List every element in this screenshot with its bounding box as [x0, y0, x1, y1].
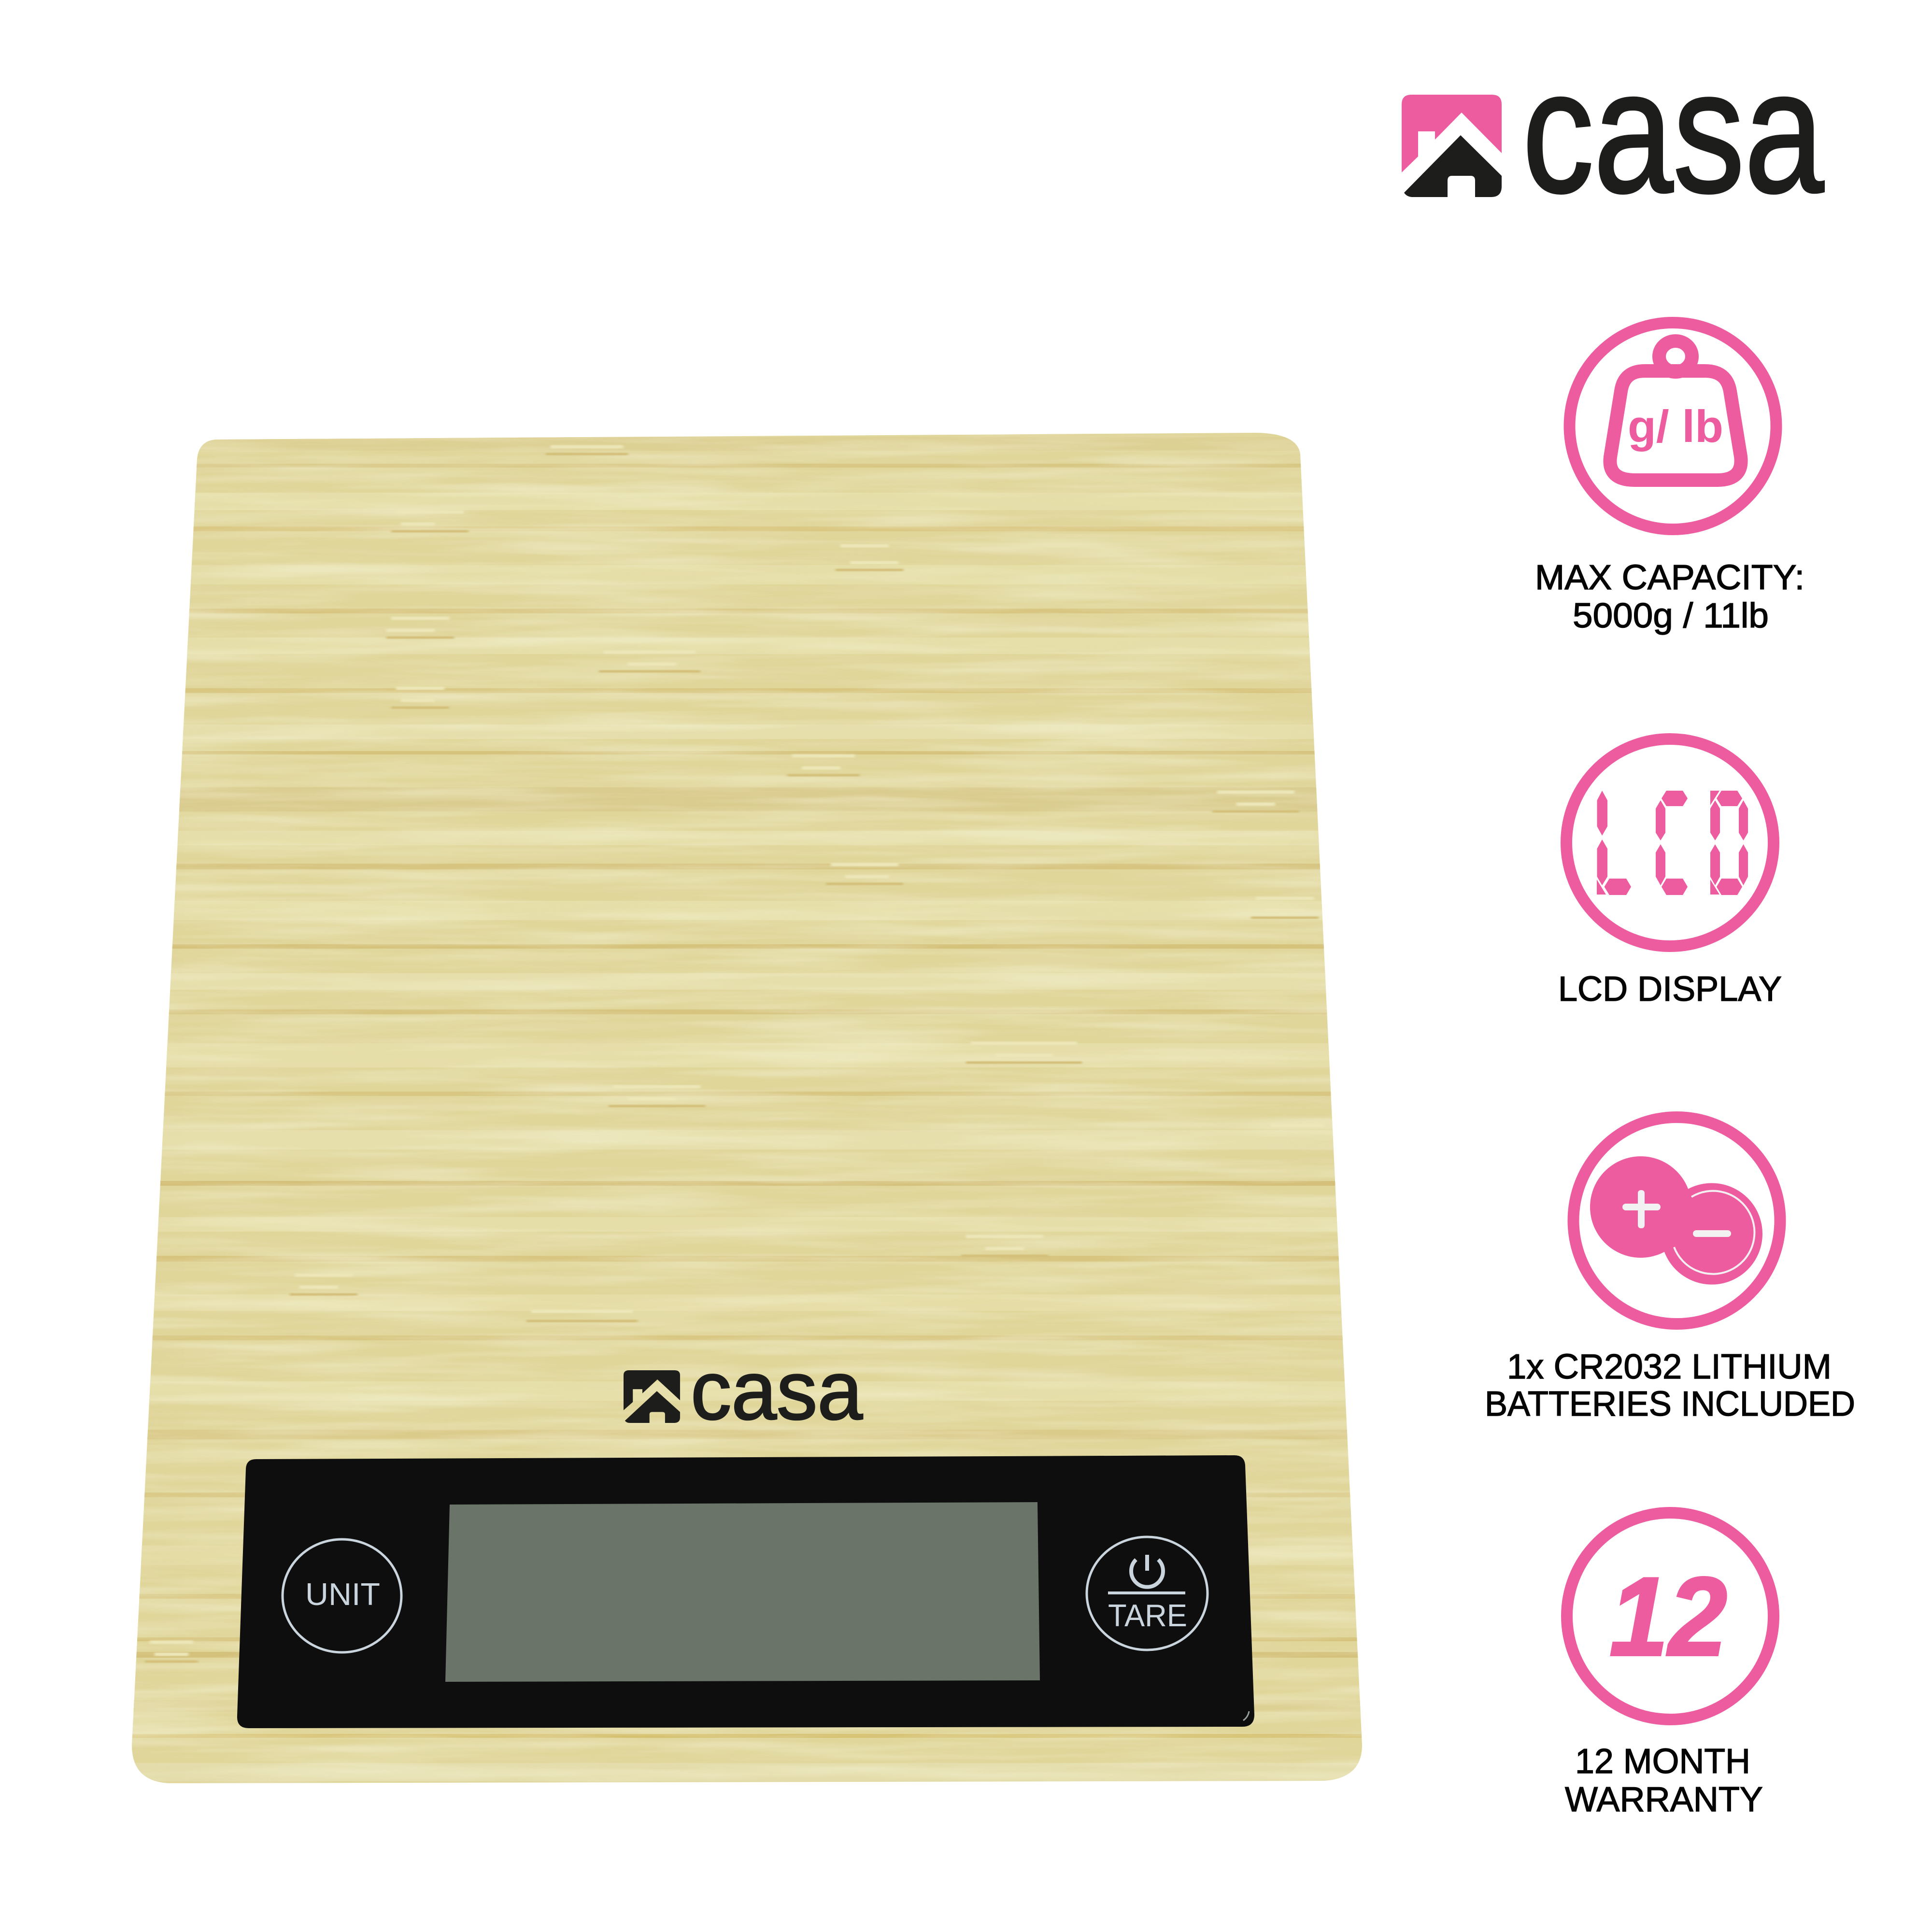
TARE button with power icon [1087, 1537, 1208, 1650]
wood surface [121, 425, 1377, 1792]
label: MAX CAPACITY: [1535, 558, 1804, 597]
label [1485, 1348, 1855, 1423]
label [1535, 558, 1804, 635]
icon: coin batteries [1574, 1117, 1780, 1324]
label: LCD DISPLAY [1558, 970, 1782, 1009]
icon: weight: g/ lb [1628, 401, 1723, 452]
feature: max capacity [1535, 323, 1804, 635]
label: 12 MONTH [1575, 1742, 1750, 1781]
label: 1x CR2032 LITHIUM [1507, 1348, 1832, 1386]
logo icon: dark house [1404, 135, 1502, 197]
product: bamboo kitchen scale [121, 425, 1377, 1792]
TARE button with power icon: TARE [1108, 1598, 1187, 1633]
black glass panel [237, 1455, 1254, 1728]
label: BATTERIES INCLUDED [1485, 1385, 1855, 1423]
label: 5000g / 11lb [1573, 597, 1769, 635]
LCD screen [445, 1502, 1040, 1682]
feature: batteries [1485, 1117, 1855, 1423]
icon: 12 months: 12 [1609, 1554, 1727, 1679]
feature: LCD display [1558, 739, 1782, 1009]
icon: 12 months [1567, 1513, 1774, 1719]
logo icon: pink roof [1402, 95, 1502, 172]
UNIT button [283, 1539, 401, 1652]
printed wordmark: casa [691, 1344, 863, 1437]
logo wordmark: casa [1522, 33, 1825, 229]
printed logo icon [624, 1370, 680, 1423]
icon: LCD segments [1566, 739, 1774, 946]
UNIT button: UNIT [305, 1577, 380, 1612]
feature: warranty [1565, 1513, 1774, 1819]
bamboo nodes [145, 447, 1323, 1662]
label [1565, 1742, 1763, 1819]
control panel [237, 1455, 1254, 1728]
panel corner highlight [1243, 1711, 1249, 1720]
icon: weight [1570, 323, 1776, 529]
casa logo [1402, 33, 1825, 229]
label: WARRANTY [1565, 1780, 1763, 1819]
printed casa logo on scale [624, 1344, 863, 1437]
